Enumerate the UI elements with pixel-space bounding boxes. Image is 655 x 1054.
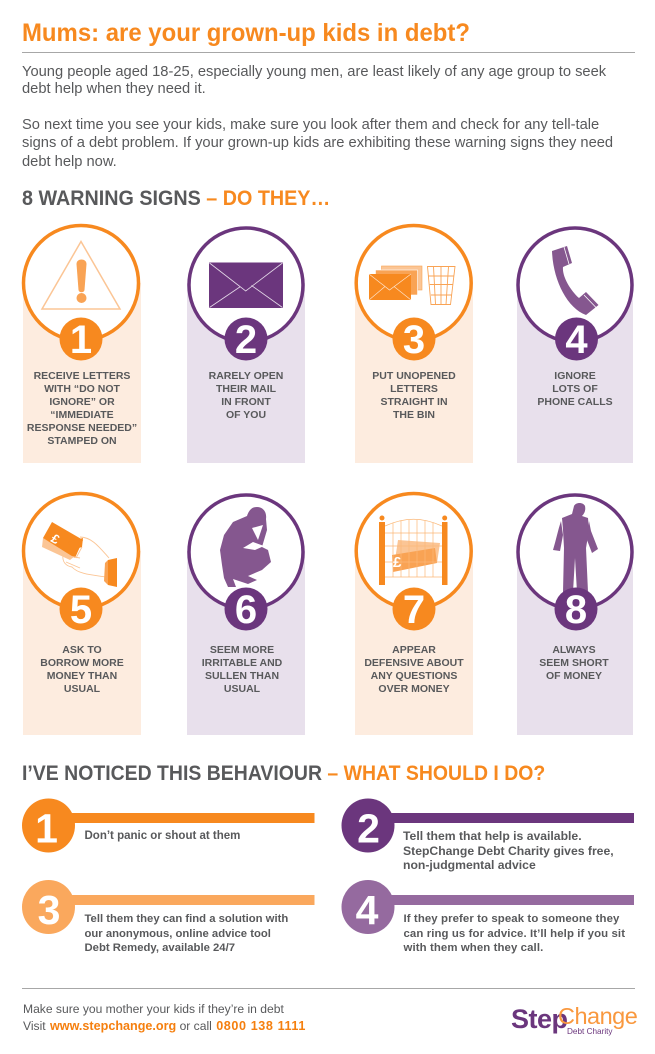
caption: sign 1: RESPONSE NEEDED”: [27, 422, 137, 434]
caption: sign 2: [209, 370, 283, 421]
caption: sign 5: [40, 644, 124, 695]
caption: sign 4: LOTS OF: [552, 383, 598, 395]
sign 4: circle and phone handset: 4: [565, 318, 588, 362]
caption: sign 3: PUT UNOPENED: [372, 370, 456, 382]
caption: sign 1: WITH “DO NOT: [44, 383, 120, 395]
caption: sign 6: SULLEN THAN: [205, 670, 279, 682]
caption: sign 8: OF MONEY: [546, 670, 602, 682]
heading: warning signs: 8 WARNING SIGNS – DO THEY…: [22, 187, 330, 210]
step 3 text: Debt Remedy, available 24/7: [84, 942, 235, 954]
caption: sign 7: OVER MONEY: [378, 683, 450, 695]
sign 8: circle and man with empty pockets: 8: [565, 588, 587, 632]
step 2 badge: [342, 798, 634, 852]
heading: what should I do: I’VE NOTICED THIS BEHAVIOUR – WHAT SHOULD I DO?: [22, 762, 545, 785]
panel: sign 8 background: [517, 551, 633, 735]
caption: sign 2: RARELY OPEN: [209, 370, 283, 382]
sign 5: circle and hand holding notes: £: [48, 531, 63, 548]
logo word: Step: Step: [511, 1004, 568, 1034]
intro text: first paragraph: debt help when they need it.: [22, 81, 206, 97]
caption: sign 3: [372, 370, 456, 421]
sign 3: circle, envelopes and bin: 3: [403, 318, 425, 362]
step 2 text: non-judgmental advice: [403, 858, 536, 872]
step 4 badge: [342, 880, 634, 934]
intro text: second paragraph: [22, 117, 613, 170]
caption: sign 4: [537, 370, 613, 408]
panel: sign 1 background: [23, 283, 141, 463]
step 3 text: [84, 913, 288, 954]
caption: sign 3: LETTERS: [390, 383, 438, 395]
logo strapline: Debt Charity: [567, 1027, 613, 1036]
step 2 badge: 2: [357, 806, 380, 852]
caption: sign 2: OF YOU: [226, 409, 266, 421]
step 4 badge: 4: [356, 887, 379, 933]
caption: sign 8: ALWAYS: [552, 644, 596, 656]
caption: sign 7: DEFENSIVE ABOUT: [364, 657, 464, 669]
panel: sign 3 background: [355, 283, 473, 463]
caption: sign 7: ANY QUESTIONS: [371, 670, 457, 682]
logo: StepChange Debt Charity: [511, 1003, 637, 1036]
caption: sign 1: IGNORE” OR: [49, 396, 115, 408]
step 4 text: [404, 913, 625, 954]
step 3 badge: 3: [38, 887, 60, 933]
caption: sign 3: STRAIGHT IN: [380, 396, 448, 408]
caption: sign 7: [364, 644, 464, 695]
step 1 badge: 1: [35, 806, 58, 852]
panel: sign 4 background: [517, 283, 633, 463]
panel: sign 7 background: [355, 551, 473, 735]
intro text: second paragraph: debt help now.: [22, 154, 117, 170]
step 2 text: [403, 829, 614, 872]
caption: sign 6: IRRITABLE AND: [202, 657, 282, 669]
caption: sign 5: BORROW MORE: [40, 657, 124, 669]
caption: sign 1: STAMPED ON: [47, 435, 117, 447]
intro text: second paragraph: signs of a debt problem. If your grown-up kids are exhibiting these warning signs they need: [22, 135, 613, 151]
caption: sign 8: [539, 644, 609, 682]
sign 1: circle and warning triangle: [24, 226, 138, 362]
sign 6: circle and crouching figure: 6: [235, 588, 257, 632]
panel: sign 5 background: [23, 551, 141, 735]
sign 2: circle and envelope: [189, 228, 303, 362]
logo word: Change: Change: [558, 1003, 637, 1029]
sign 1: circle and warning triangle: 1: [70, 318, 92, 362]
caption: sign 1: RECEIVE LETTERS: [34, 370, 130, 382]
footer text: [23, 1002, 306, 1033]
step 2 text: Tell them that help is available.: [403, 829, 582, 843]
caption: sign 3: THE BIN: [393, 409, 435, 421]
caption: sign 4: PHONE CALLS: [537, 396, 613, 408]
title: Mums: are your grown-up kids in debt?: [22, 19, 470, 47]
sign 6: circle and crouching figure: [189, 495, 303, 632]
sign 5: circle and hand holding notes: 5: [70, 588, 92, 632]
step 3 badge: [22, 880, 314, 934]
caption: sign 8: SEEM SHORT: [539, 657, 609, 669]
step 4 text: with them when they call.: [404, 942, 543, 954]
panel: sign 6 background: [187, 551, 305, 735]
footer text: Make sure you mother your kids if they’re in debt: [23, 1002, 284, 1016]
intro text: second paragraph: So next time you see your kids, make sure you look after them and check for any tell-tale: [22, 117, 599, 133]
sign 4: circle and phone handset: [518, 228, 632, 362]
step 1 badge: [22, 798, 314, 852]
sign 2: circle and envelope: 2: [235, 318, 257, 362]
step 1 text: Don’t panic or shout at them: [84, 830, 240, 842]
step 2 text: StepChange Debt Charity gives free,: [403, 844, 614, 858]
footer text: Visit www.stepchange.org or call 0800 138 1111: [23, 1019, 306, 1033]
caption: sign 4: IGNORE: [554, 370, 596, 382]
caption: sign 6: USUAL: [224, 683, 260, 695]
step 4 text: If they prefer to speak to someone they: [404, 913, 619, 925]
caption: sign 1: “IMMEDIATE: [50, 409, 114, 421]
sign 7: circle and gated notes: [356, 494, 471, 632]
intro text: first paragraph: Young people aged 18-25, especially young men, are least likely of any age group to seek: [22, 64, 606, 80]
caption: sign 5: ASK TO: [62, 644, 102, 656]
sign 5: circle and hand holding notes: [24, 494, 138, 632]
caption: sign 6: [202, 644, 282, 695]
step 3 text: our anonymous, online advice tool: [84, 928, 271, 940]
step 4 text: can ring us for advice. It’ll help if you sit: [404, 928, 625, 940]
intro text: first paragraph: [22, 64, 606, 97]
caption: sign 1: [27, 370, 137, 447]
sign 7: circle and gated notes: £: [393, 554, 402, 571]
panel: sign 2 background: [187, 283, 305, 463]
caption: sign 5: MONEY THAN: [47, 670, 117, 682]
sign 8: circle and man with empty pockets: [518, 495, 632, 632]
caption: sign 6: SEEM MORE: [210, 644, 274, 656]
sign 3: circle, envelopes and bin: [356, 226, 471, 362]
caption: sign 7: APPEAR: [392, 644, 436, 656]
caption: sign 2: IN FRONT: [221, 396, 271, 408]
step 3 text: Tell them they can find a solution with: [84, 913, 288, 925]
caption: sign 2: THEIR MAIL: [216, 383, 276, 395]
sign 7: circle and gated notes: 7: [403, 588, 425, 632]
caption: sign 5: USUAL: [64, 683, 100, 695]
